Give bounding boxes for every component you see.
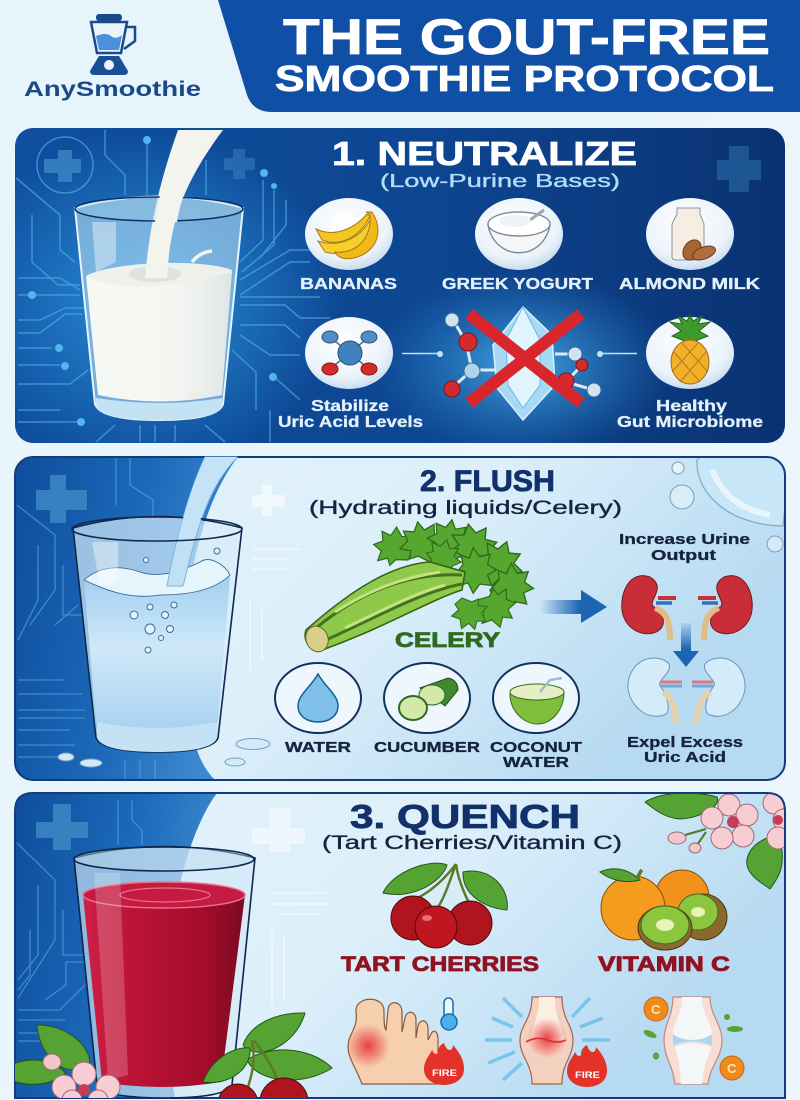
label: tart cherries: TART CHERRIES bbox=[341, 953, 539, 976]
icon: healthy joint bbox=[642, 997, 744, 1084]
label: healthy gut microbiome bbox=[617, 398, 763, 431]
section heading: 3. QUENCH bbox=[350, 798, 580, 835]
label: expel excess uric acid: Uric Acid bbox=[644, 749, 726, 766]
icon: fire badge on knee bbox=[567, 1045, 607, 1087]
label: stabilize uric acid levels: Uric Acid Levels bbox=[278, 414, 423, 431]
label: almond milk: ALMOND MILK bbox=[619, 276, 761, 293]
icon: water droplets bbox=[670, 457, 790, 552]
label: water: WATER bbox=[285, 740, 352, 756]
icon: glass of water bbox=[72, 457, 242, 752]
icon: thermometer bbox=[441, 998, 457, 1030]
logo wordmark: AnySmoothie bbox=[24, 78, 201, 101]
icon: clear kidneys bbox=[628, 658, 745, 724]
label: bananas: BANANAS bbox=[300, 276, 397, 293]
label: greek yogurt: GREEK YOGURT bbox=[442, 276, 594, 293]
arrow: from pineapple to crystal bbox=[597, 351, 637, 357]
label: expel excess uric acid: Expel Excess bbox=[627, 734, 743, 751]
label: increase urine output bbox=[619, 531, 750, 564]
label: coconut water bbox=[490, 740, 582, 771]
section heading: 1. NEUTRALIZE bbox=[332, 135, 637, 172]
header: logo bbox=[24, 14, 201, 101]
label: healthy gut microbiome: Healthy bbox=[656, 398, 727, 415]
arrow: celery to kidneys bbox=[540, 590, 607, 623]
icon: molecule bbox=[305, 317, 393, 389]
panel: flush bbox=[15, 457, 790, 780]
section subheading: (Tart Cherries/Vitamin C) bbox=[322, 833, 622, 854]
icon: fire badge on knee: FIRE bbox=[575, 1070, 600, 1080]
arrow: from molecule to crystal bbox=[402, 351, 443, 357]
icon: cucumber bbox=[384, 663, 470, 733]
label: expel excess uric acid bbox=[627, 734, 743, 766]
icon: almond milk bbox=[646, 198, 734, 270]
title line 2: SMOOTHIE PROTOCOL bbox=[275, 58, 774, 99]
section heading: 2. FLUSH bbox=[420, 465, 555, 498]
icon: red kidneys bbox=[622, 576, 752, 640]
arrow: kidneys downward bbox=[673, 623, 699, 667]
icon: greek yogurt bbox=[475, 198, 563, 270]
icon: blender bbox=[90, 14, 135, 75]
section subheading: (Low-Purine Bases) bbox=[380, 171, 620, 191]
section subheading: (Hydrating liquids/Celery) bbox=[309, 498, 622, 519]
icon: glass of milk bbox=[75, 130, 243, 420]
label: stabilize uric acid levels bbox=[278, 398, 423, 431]
label: celery: CELERY bbox=[395, 629, 500, 652]
icon: inflamed foot bbox=[346, 999, 438, 1084]
icon: spilled droplets bbox=[58, 738, 270, 767]
icon: inflamed knee bbox=[485, 997, 610, 1084]
label: vitamin c: VITAMIN C bbox=[598, 953, 730, 976]
header: title banner bbox=[218, 0, 800, 112]
icon: healthy joint: C bbox=[651, 1002, 661, 1017]
icon: celery bbox=[302, 514, 536, 655]
label: increase urine output: Increase Urine bbox=[619, 531, 750, 548]
icon: blossom and leaves at lower left bbox=[15, 1024, 120, 1098]
panel: neutralize bbox=[0, 128, 785, 470]
icon: coconut water bbox=[493, 663, 579, 733]
label: cucumber: CUCUMBER bbox=[374, 740, 481, 756]
icon: fire badge on foot bbox=[424, 1043, 464, 1085]
title line 1: THE GOUT-FREE bbox=[283, 9, 770, 65]
icon: water bbox=[275, 663, 361, 733]
icon: healthy joint: C bbox=[727, 1061, 737, 1076]
icon: glass of cherry juice bbox=[74, 846, 255, 1098]
icon: pineapple bbox=[646, 315, 734, 389]
icon: fire badge on foot: FIRE bbox=[432, 1068, 457, 1078]
icon: cherries and leaves at lower right of glass bbox=[203, 1013, 332, 1100]
label: healthy gut microbiome: Gut Microbiome bbox=[617, 414, 763, 431]
icon: cherries bbox=[383, 863, 507, 948]
icon: bananas bbox=[305, 198, 393, 270]
icon: crossed-out uric acid crystal bbox=[444, 307, 601, 420]
label: increase urine output: Output bbox=[651, 547, 716, 564]
label: coconut water: WATER bbox=[503, 755, 570, 771]
icon: cherry blossoms top right bbox=[645, 792, 795, 889]
label: coconut water: COCONUT bbox=[490, 740, 582, 756]
label: stabilize uric acid levels: Stabilize bbox=[311, 398, 389, 415]
icon: oranges and kiwi bbox=[600, 869, 727, 950]
panel: quench bbox=[0, 792, 795, 1100]
